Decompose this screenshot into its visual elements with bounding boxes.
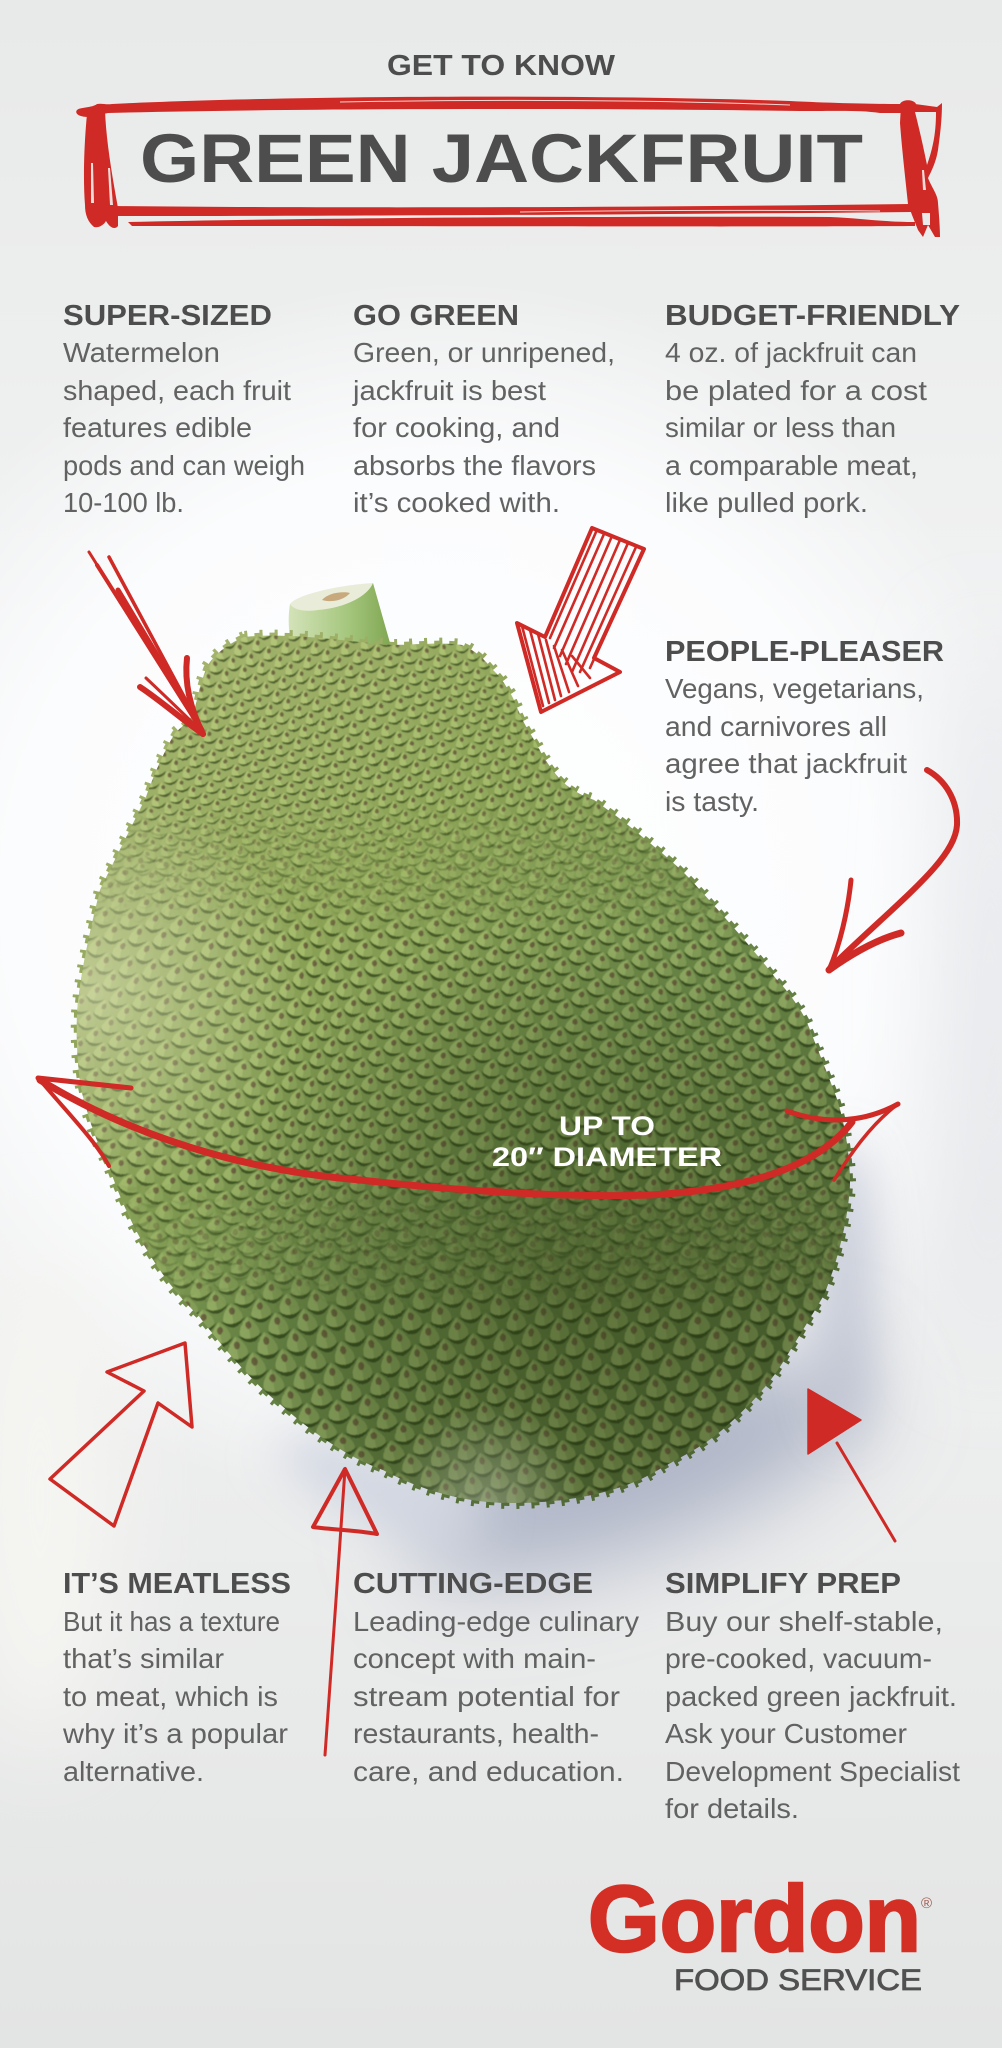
text block: people-pleaser: agree that jackfruit	[665, 748, 907, 779]
text block: people-pleaser: and carnivores all	[665, 711, 887, 742]
text block: super-sized: Watermelon	[63, 337, 220, 368]
text block: super-sized: pods and can weigh	[63, 450, 305, 481]
diameter label	[492, 1111, 722, 1172]
text block: super-sized: SUPER-SIZED	[63, 300, 272, 332]
text block: cutting-edge	[353, 1568, 639, 1787]
text block: people-pleaser: is tasty.	[665, 786, 759, 817]
text block: super-sized: features edible	[63, 412, 252, 443]
text block: budget-friendly	[665, 300, 960, 518]
text block: budget-friendly: a comparable meat,	[665, 450, 918, 481]
logo: gordon food service: ®	[921, 1895, 932, 1912]
logo: gordon food service: FOOD SERVICE	[674, 1964, 922, 1997]
text block: people-pleaser: PEOPLE-PLEASER	[665, 636, 944, 668]
text block: cutting-edge: concept with main-	[353, 1643, 596, 1674]
right bar and spare stroke	[900, 103, 942, 237]
text block: people-pleaser	[665, 636, 944, 817]
text block: simplify prep: packed green jackfruit.	[665, 1681, 957, 1712]
arrow: hatched block	[517, 528, 644, 712]
text block: budget-friendly: BUDGET-FRIENDLY	[665, 300, 960, 332]
arrow: curved from people-pleaser	[829, 770, 957, 970]
text block: simplify prep: pre-cooked, vacuum-	[665, 1643, 932, 1674]
arrow: solid triangle to simplify prep	[808, 1389, 895, 1541]
arrow: sketchy to shoulder	[89, 552, 203, 734]
arrow: outline to meatless	[50, 1343, 192, 1526]
text block: cutting-edge: restaurants, health-	[353, 1718, 599, 1749]
text block: go green: it’s cooked with.	[353, 487, 560, 518]
text block: go green: for cooking, and	[353, 412, 560, 443]
text block: super-sized	[63, 300, 305, 518]
text block: simplify prep: for details.	[665, 1793, 799, 1824]
text block: cutting-edge: care, and education.	[353, 1756, 624, 1787]
text block: go green: Green, or unripened,	[353, 337, 615, 368]
jackfruit photo illustration	[70, 583, 856, 1509]
text block: it's meatless	[62, 1568, 291, 1787]
text block: go green: GO GREEN	[353, 300, 519, 332]
text block: budget-friendly: 4 oz. of jackfruit can	[665, 337, 917, 368]
bottom band	[116, 204, 912, 216]
fruit stem	[289, 583, 392, 650]
text block: go green	[352, 300, 615, 518]
text block: cutting-edge: Leading-edge culinary	[353, 1606, 639, 1637]
text block: budget-friendly: like pulled pork.	[665, 487, 868, 518]
text block: it's meatless: But it has a texture	[63, 1606, 280, 1637]
lower sketch line	[128, 217, 915, 226]
text block: go green: absorbs the flavors	[353, 450, 596, 481]
text block: budget-friendly: be plated for a cost	[665, 375, 927, 406]
text block: go green: jackfruit is best	[352, 375, 546, 406]
text block: cutting-edge: stream potential for	[353, 1681, 620, 1712]
text block: simplify prep: Ask your Customer	[665, 1718, 907, 1749]
text block: super-sized: shaped, each fruit	[63, 375, 291, 406]
top band	[76, 97, 916, 117]
fruit body with spikes	[70, 630, 856, 1509]
left bar	[84, 110, 118, 228]
frame hole	[915, 112, 936, 165]
text block: simplify prep: Buy our shelf-stable,	[665, 1606, 943, 1637]
sketched red title frame	[76, 97, 942, 237]
diameter label: 20″ DIAMETER	[492, 1142, 722, 1172]
text block: budget-friendly: similar or less than	[665, 412, 896, 443]
text block: simplify prep: SIMPLIFY PREP	[665, 1568, 901, 1600]
title: green jackfruit: GREEN JACKFRUIT	[140, 120, 863, 197]
text block: people-pleaser: Vegans, vegetarians,	[665, 673, 924, 704]
text block: it's meatless: that’s similar	[63, 1643, 224, 1674]
diameter label: UP TO	[559, 1111, 655, 1141]
text block: simplify prep: Development Specialist	[665, 1756, 960, 1787]
text block: it's meatless: IT’S MEATLESS	[63, 1568, 291, 1600]
fruit cast shadow	[268, 1140, 891, 1623]
text block: it's meatless: to meat, which is	[63, 1681, 278, 1712]
text block: super-sized: 10-100 lb.	[63, 487, 184, 518]
text block: simplify prep	[665, 1568, 960, 1824]
text block: cutting-edge: CUTTING-EDGE	[353, 1568, 593, 1600]
heading: get to know: GET TO KNOW	[387, 50, 616, 82]
arrow: thin shaft to cutting-edge	[313, 1469, 377, 1755]
logo: gordon food service: Gordon	[588, 1866, 921, 1971]
text block: it's meatless: why it’s a popular	[62, 1718, 288, 1749]
text block: it's meatless: alternative.	[63, 1756, 204, 1787]
arrow: diameter span	[38, 1078, 898, 1196]
